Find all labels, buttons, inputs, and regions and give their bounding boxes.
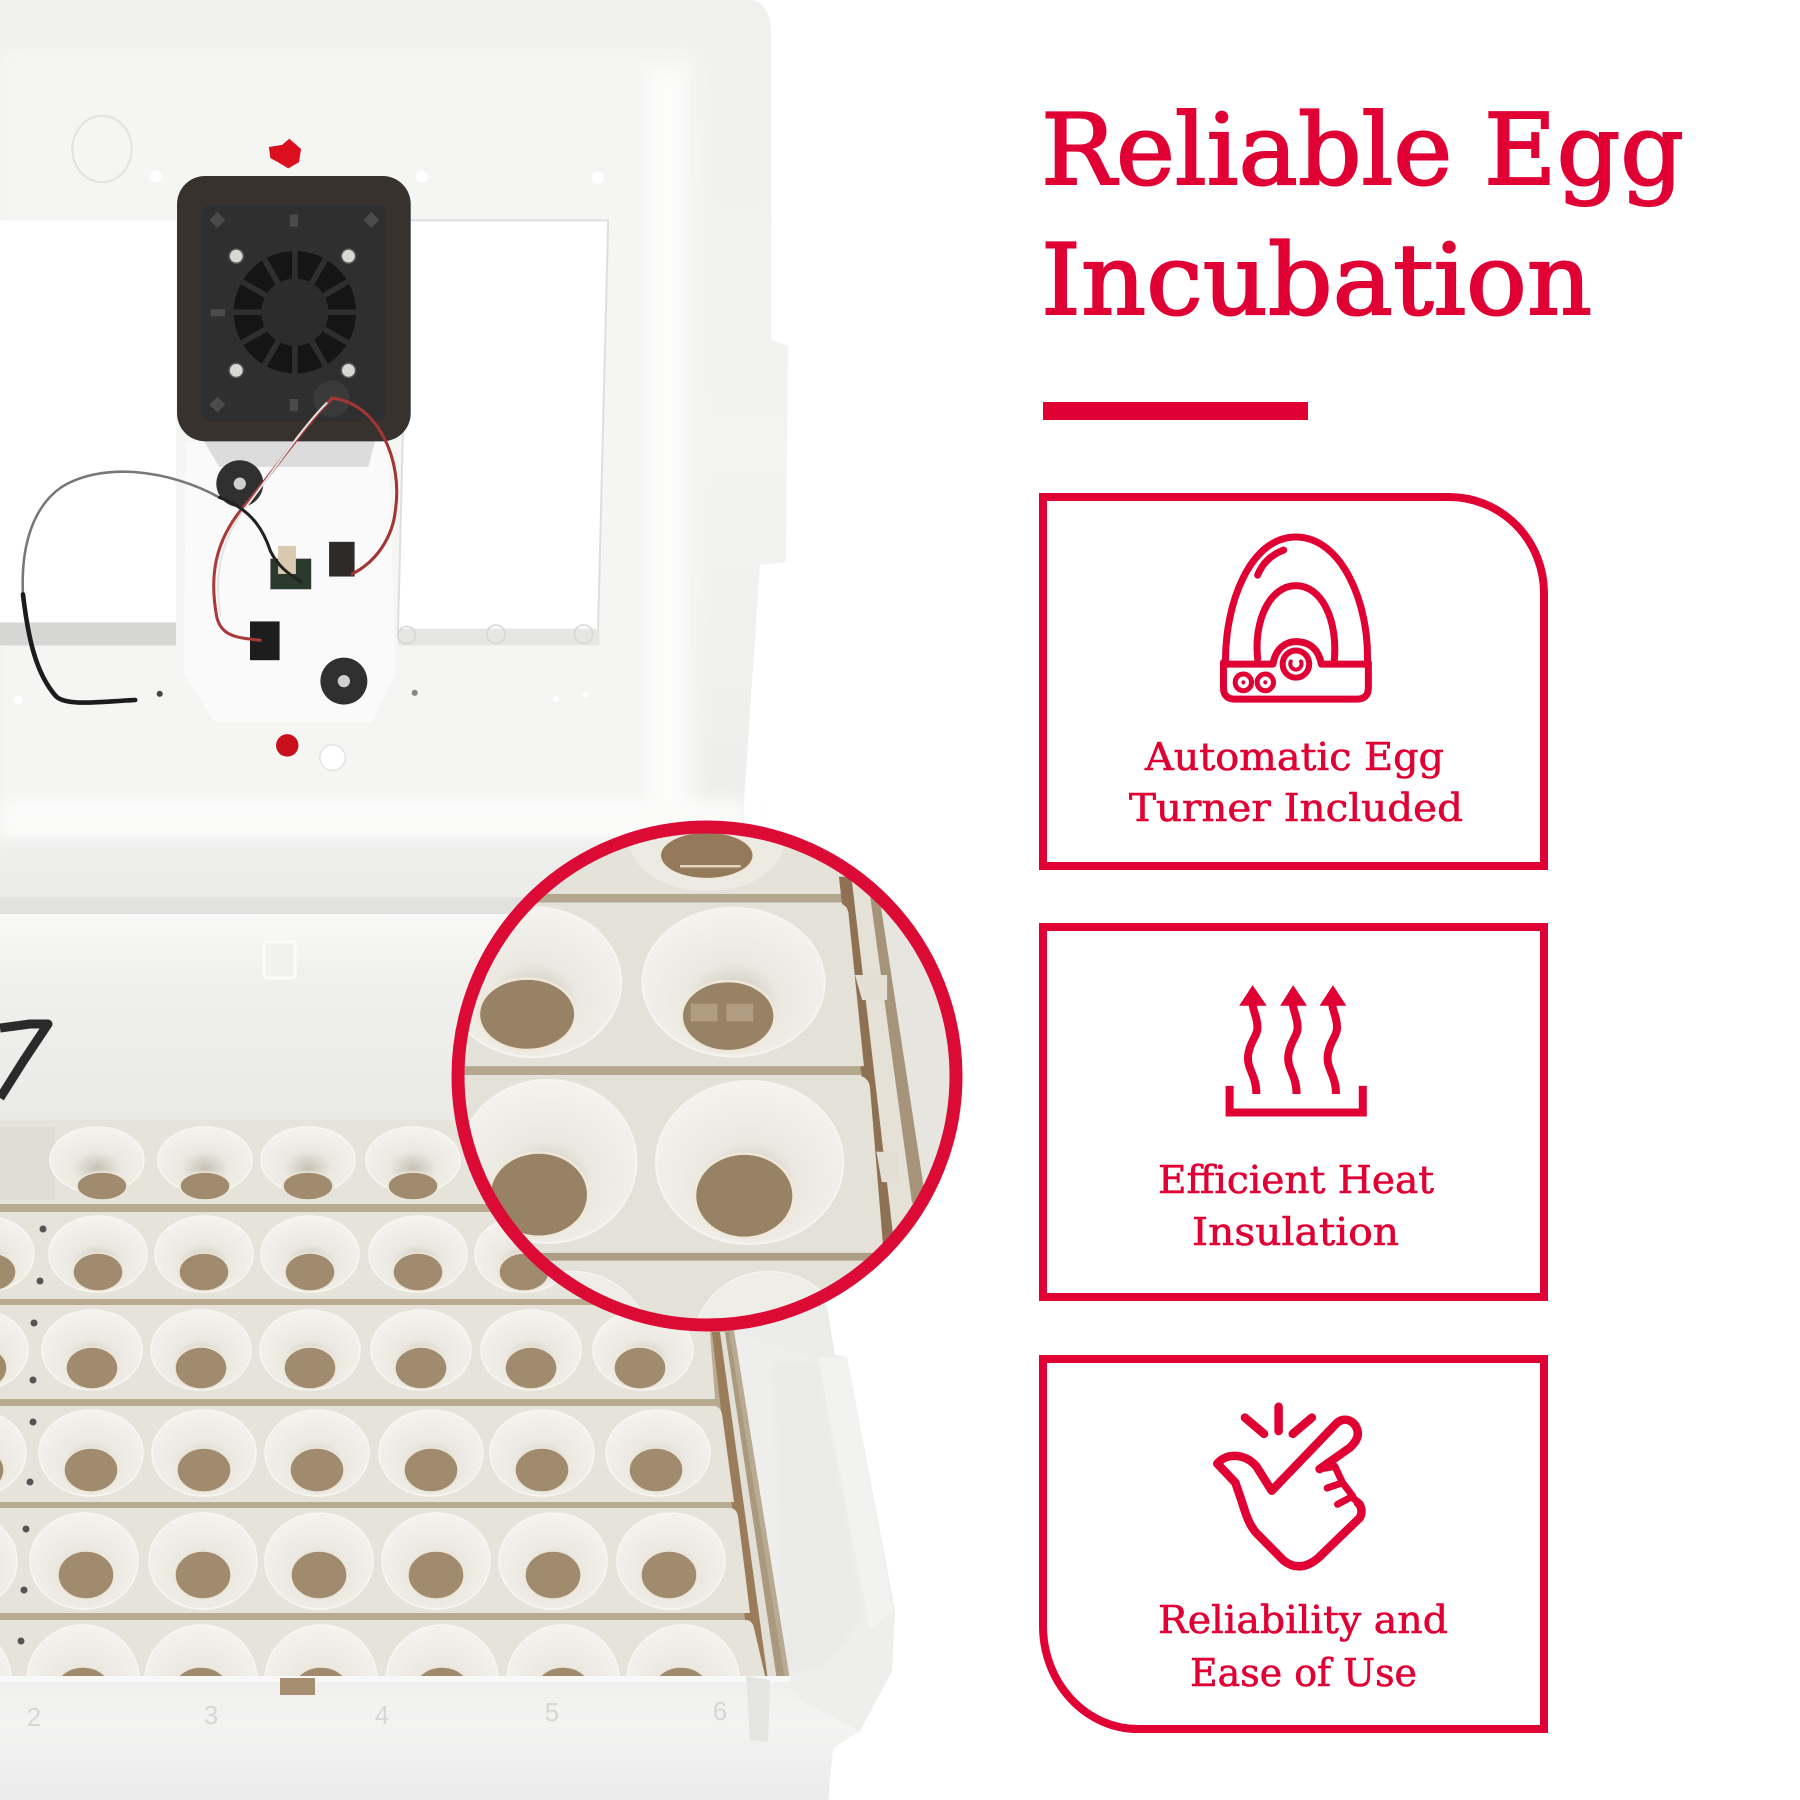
card outline: [1043, 1359, 1544, 1729]
card label: Automatic Egg: [1144, 735, 1444, 779]
magnified top row hole: [630, 835, 783, 891]
card label: Efficient Heat: [1158, 1158, 1434, 1202]
white mounting plate: [184, 441, 395, 722]
card label: [1158, 1158, 1434, 1254]
title: Reliable Egg: [1041, 94, 1684, 208]
magnified tray row B: [862, 1076, 883, 1246]
magnified separators: [538, 894, 842, 902]
red indicator dot: [276, 734, 298, 757]
embossed slot numbers: 4: [375, 1700, 389, 1730]
card label: Insulation: [1192, 1210, 1399, 1254]
tray row 1: [0, 1212, 582, 1299]
embossed slot numbers: 6: [713, 1696, 727, 1726]
magnified detail circle: [452, 820, 962, 1332]
tray row 2: [0, 1305, 715, 1399]
embossed slot numbers: 5: [545, 1697, 559, 1727]
red plug: [269, 139, 301, 168]
tray row 5: [0, 1620, 766, 1676]
card label: [1129, 735, 1463, 830]
tray row 0: [0, 1120, 486, 1204]
magnified rail: [838, 876, 893, 1243]
tray row 4: [0, 1508, 750, 1613]
card outline: [1043, 497, 1544, 866]
icon: snapping hand: [1217, 1407, 1361, 1566]
card label: Reliability and: [1158, 1598, 1448, 1642]
fan: [234, 251, 356, 373]
base front wall: [0, 1676, 860, 1800]
magnified tray content: [464, 834, 950, 1318]
circuit boards: [270, 559, 311, 589]
black cable: [0, 1024, 48, 1098]
magnified cups row A: [446, 907, 843, 1244]
tray rails: [712, 1332, 768, 1680]
card label: [1158, 1598, 1448, 1695]
wires: [23, 398, 397, 703]
embossed slot numbers: [27, 1696, 727, 1732]
product photo: incubator: [0, 0, 895, 1800]
magnets: [216, 460, 263, 507]
magnified tray row A: [430, 904, 864, 1066]
fan screws: [229, 249, 356, 378]
magnified tray row C: [550, 1260, 864, 1261]
icon: incubator dome: [1223, 537, 1368, 699]
lid window openings and fan assembly: [0, 116, 608, 770]
title underline bar: [1043, 402, 1308, 420]
card: reliability and ease of use: [1043, 1359, 1544, 1729]
base side rim: [733, 1332, 895, 1731]
card label: Turner Included: [1129, 786, 1463, 830]
fan housing: [177, 176, 411, 441]
card label: Ease of Use: [1190, 1651, 1417, 1695]
clear indicator dot: [320, 745, 345, 770]
card outline: [1043, 927, 1544, 1297]
base back wall: [0, 914, 700, 1124]
icon: rising heat arrows: [1230, 985, 1363, 1112]
magnified holes: [479, 979, 794, 1238]
title: Incubation: [1041, 224, 1592, 338]
title: [1041, 94, 1684, 338]
red ring: [458, 827, 956, 1325]
card: automatic egg turner: [1043, 497, 1544, 866]
tray row 3: [0, 1406, 734, 1502]
embossed slot numbers: 3: [204, 1700, 218, 1730]
incubator lid: [0, 0, 788, 915]
card: efficient heat insulation: [1043, 927, 1544, 1297]
embossed slot numbers: 2: [27, 1702, 41, 1732]
incubator base body: [0, 1100, 895, 1800]
egg tray rows: [0, 1118, 790, 1735]
